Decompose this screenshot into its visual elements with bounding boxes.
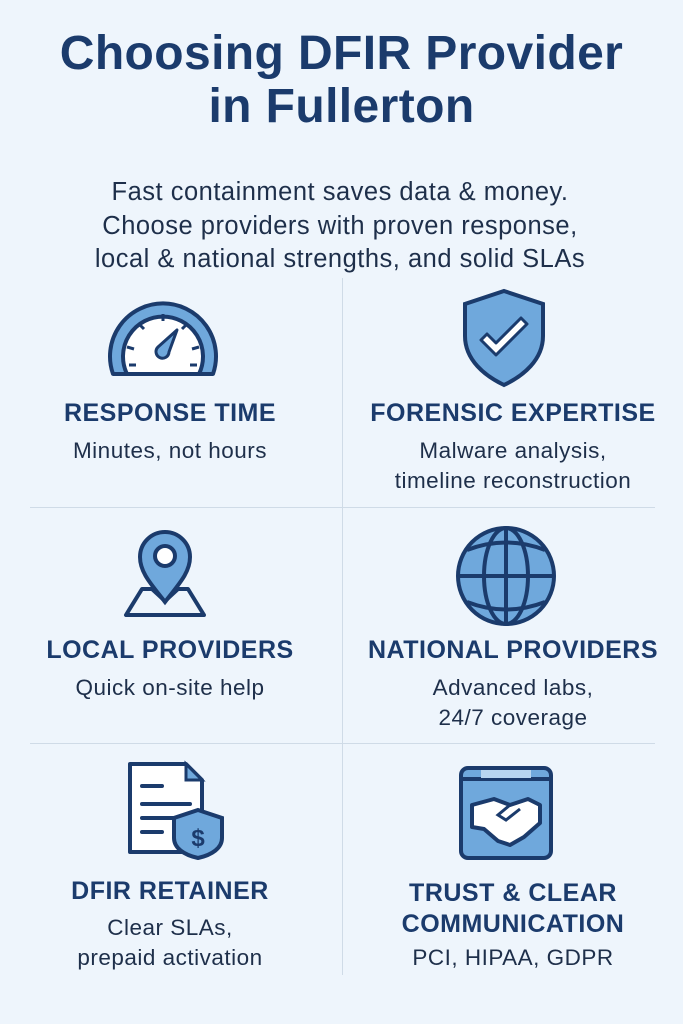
title [60, 27, 623, 133]
caption: 24/7 coverage [438, 705, 588, 730]
heading: DFIR RETAINER [71, 877, 269, 905]
heading [402, 879, 624, 938]
heading: NATIONAL PROVIDERS [368, 636, 658, 664]
panel: trust [402, 766, 624, 970]
icon: speedometer [108, 301, 218, 376]
icon: map pin [124, 530, 206, 617]
panel: forensic expertise [370, 288, 656, 493]
caption: Quick on-site help [75, 675, 265, 700]
caption: Clear SLAs, [107, 915, 233, 940]
heading: TRUST & CLEAR [409, 879, 617, 907]
caption: Minutes, not hours [73, 438, 267, 463]
icon: shield check [463, 288, 545, 388]
caption: Advanced labs, [433, 675, 593, 700]
panel: local providers [46, 530, 294, 700]
title: in Fullerton [208, 80, 475, 133]
panel: national providers [368, 526, 658, 730]
caption: timeline reconstruction [395, 468, 631, 493]
icon: globe [456, 526, 556, 626]
caption [77, 915, 263, 970]
heading: COMMUNICATION [402, 910, 624, 938]
subtitle [95, 178, 585, 273]
title: Choosing DFIR Provider [60, 27, 623, 80]
caption: prepaid activation [77, 945, 263, 970]
panel: response time [64, 301, 276, 463]
heading: FORENSIC EXPERTISE [370, 399, 656, 427]
panel: dfir retainer [71, 760, 269, 970]
icon: document with dollar shield [128, 760, 224, 860]
caption: Malware analysis, [419, 438, 607, 463]
caption [395, 438, 631, 493]
subtitle: Fast containment saves data & money. [112, 178, 568, 206]
icon: document with dollar shield: $ [191, 825, 205, 852]
subtitle: Choose providers with proven response, [102, 212, 578, 240]
icon: handshake window [459, 766, 553, 860]
heading: RESPONSE TIME [64, 399, 276, 427]
caption: PCI, HIPAA, GDPR [412, 945, 614, 970]
subtitle: local & national strengths, and solid SLAs [95, 245, 585, 273]
heading: LOCAL PROVIDERS [46, 636, 294, 664]
caption [432, 675, 593, 730]
